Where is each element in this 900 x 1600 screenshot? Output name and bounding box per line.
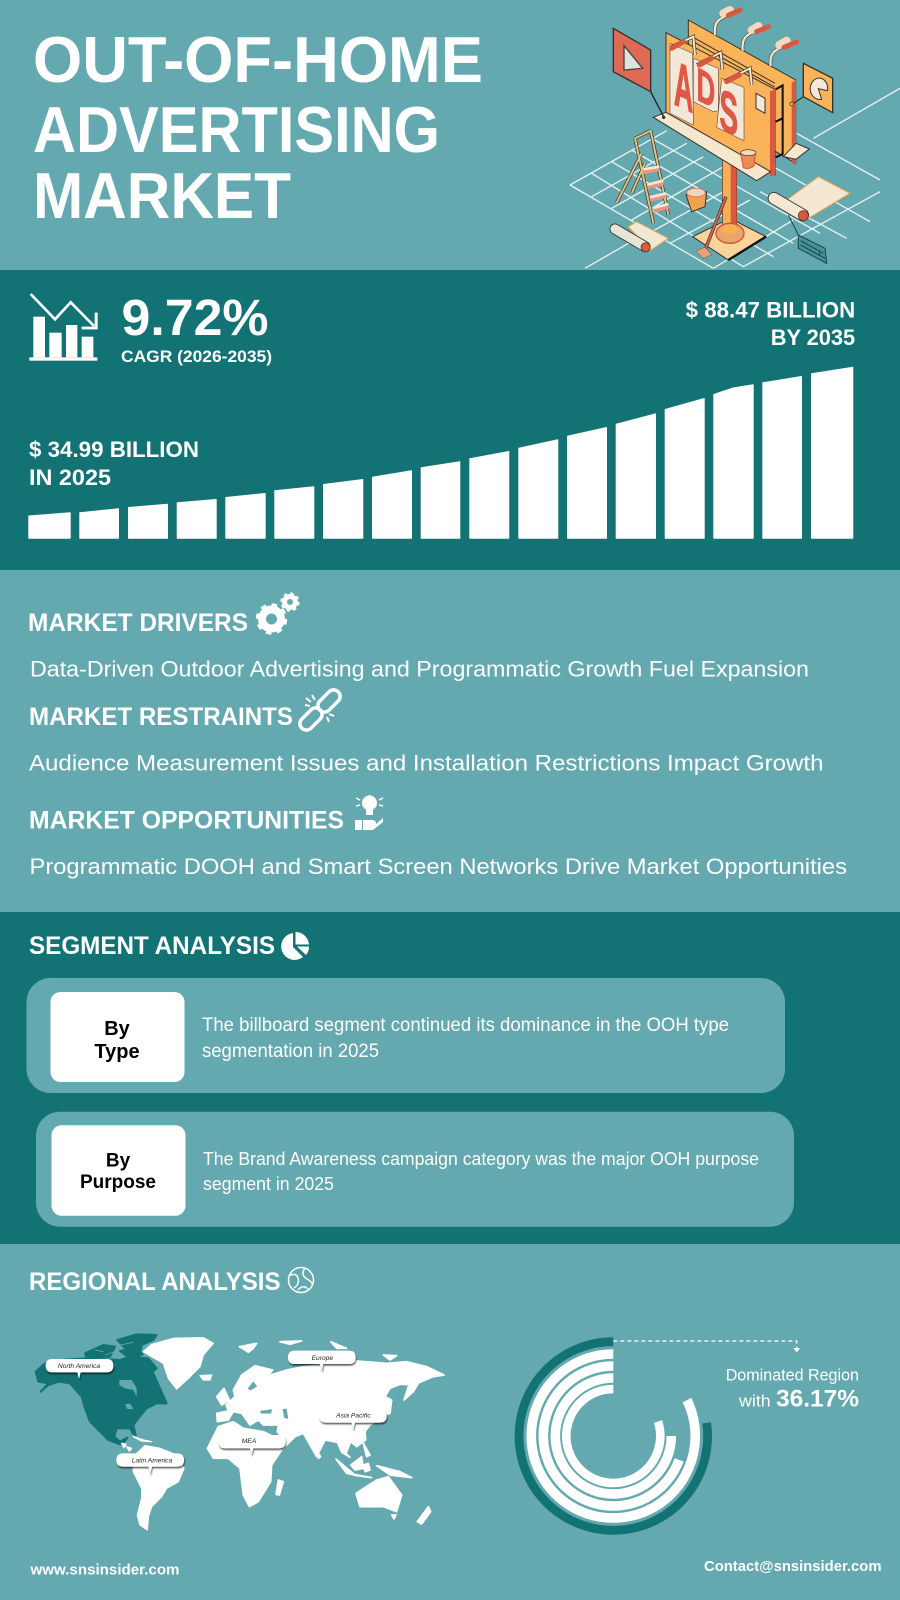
start value: [29, 437, 199, 490]
icon: chart: [29, 294, 98, 361]
heading: market restraints: MARKET RESTRAINTS: [29, 703, 293, 731]
text: drivers: Data-Driven Outdoor Advertising and Programmatic Growth Fuel Expansion: [30, 657, 809, 682]
ADS letters: D: [697, 58, 715, 120]
callout: dominated region: with: [738, 1392, 771, 1411]
panel: market dynamics: [28, 594, 847, 879]
callout: dominated region: [726, 1366, 859, 1413]
roll left: [615, 222, 668, 252]
ground scene: [570, 88, 900, 268]
title: [33, 23, 483, 232]
label: by type: By: [104, 1018, 131, 1040]
callout: asia pacific: Asia Pacific: [335, 1413, 371, 1420]
back panel: [688, 20, 809, 163]
label: by type: [50, 992, 184, 1082]
text: by type: segmentation in 2025: [202, 1041, 379, 1062]
eurasia africa oceania: [207, 1341, 444, 1524]
callout: north america: [46, 1359, 113, 1379]
radial chart: [519, 1342, 708, 1530]
callout: north america: North America: [58, 1363, 100, 1370]
callout: latin america: [116, 1453, 184, 1475]
text: restraints: Audience Measurement Issues and Installation Restrictions Impact Growth: [29, 751, 824, 776]
red play sign: [613, 28, 665, 119]
bucket: [741, 150, 756, 169]
card: by purpose: [36, 1112, 794, 1227]
callout: latin america: Latin America: [132, 1458, 173, 1465]
text: by type: [202, 1015, 729, 1062]
label: by purpose: [52, 1125, 186, 1216]
chart sign: [790, 63, 833, 113]
roll right: [774, 177, 850, 221]
ADS letters: S: [719, 76, 738, 149]
callout: europe: Europe: [312, 1355, 333, 1362]
start value: $ 34.99 BILLION: [29, 437, 199, 462]
americas: [36, 1334, 213, 1530]
icon: idea hand: [355, 795, 383, 830]
heading: market drivers: MARKET DRIVERS: [28, 609, 248, 637]
region: north america: [36, 1334, 167, 1444]
arc: dominated region: [519, 1342, 708, 1530]
title: MARKET: [33, 159, 291, 232]
base and pole: [693, 153, 766, 260]
footer: website: www.snsinsider.com: [29, 1562, 180, 1578]
card: by type: [26, 978, 785, 1093]
heading: regional analysis: REGIONAL ANALYSIS: [29, 1268, 280, 1296]
ladder: [617, 131, 668, 223]
callout: dominated region: Dominated Region: [726, 1366, 859, 1385]
callout: europe: [288, 1351, 356, 1371]
panel: segment analysis: [0, 912, 900, 1244]
paint pot: [686, 188, 707, 212]
icon: globe: [288, 1268, 314, 1292]
text: by purpose: The Brand Awareness campaign category was the major OOH purpose: [203, 1148, 759, 1169]
callout: mea: [218, 1435, 286, 1455]
greenland and south america: [122, 1338, 213, 1530]
world map: [36, 1334, 444, 1530]
start value: IN 2025: [29, 465, 111, 490]
map callouts: [46, 1351, 387, 1475]
label: by purpose: By: [106, 1151, 131, 1172]
icon: broken link: [297, 687, 343, 733]
title: OUT-OF-HOME: [33, 23, 483, 96]
CAGR label: CAGR (2026-2035): [121, 347, 272, 366]
ADS letters: [674, 48, 738, 149]
lakes and straits: [95, 1342, 137, 1409]
CAGR value: 9.72%: [122, 289, 268, 346]
text: by purpose: [203, 1148, 759, 1194]
text: by type: The billboard segment continued its dominance in the OOH type: [202, 1015, 729, 1036]
title: ADVERTISING: [33, 93, 440, 166]
text: opportunities: Programmatic DOOH and Smart Screen Networks Drive Market Opportunities: [30, 854, 847, 879]
bar chart: [29, 367, 853, 538]
front panel: [653, 33, 783, 181]
icon: pie chart: [281, 932, 309, 960]
hatch sign: [788, 215, 827, 263]
arrow: dashed leader: [613, 1341, 800, 1352]
callout: asia pacific: [319, 1409, 387, 1430]
label: by purpose: Purpose: [80, 1172, 156, 1193]
heading: segment analysis: SEGMENT ANALYSIS: [29, 932, 275, 960]
end value: BY 2035: [771, 325, 855, 350]
billboard structure: [613, 10, 833, 181]
back lamps: [715, 10, 797, 66]
end value: $ 88.47 BILLION: [686, 298, 855, 323]
footer: contact: Contact@snsinsider.com: [704, 1558, 882, 1575]
front lamps: [672, 37, 752, 85]
ADS letters: A: [674, 48, 693, 127]
icon: gears: [258, 594, 298, 633]
floor grid: [570, 88, 900, 268]
callout: mea: MEA: [242, 1438, 257, 1445]
header panel: [33, 10, 900, 268]
heading: market opportunities: MARKET OPPORTUNITIES: [29, 807, 344, 835]
end value: [686, 298, 855, 350]
label: by type: Type: [94, 1041, 140, 1063]
callout: dominated region: 36.17%: [776, 1386, 859, 1413]
text: by purpose: segment in 2025: [203, 1173, 334, 1194]
panel: regional analysis: [29, 1268, 859, 1530]
illustration: billboard: [570, 10, 900, 268]
panel: market size: [0, 270, 900, 570]
